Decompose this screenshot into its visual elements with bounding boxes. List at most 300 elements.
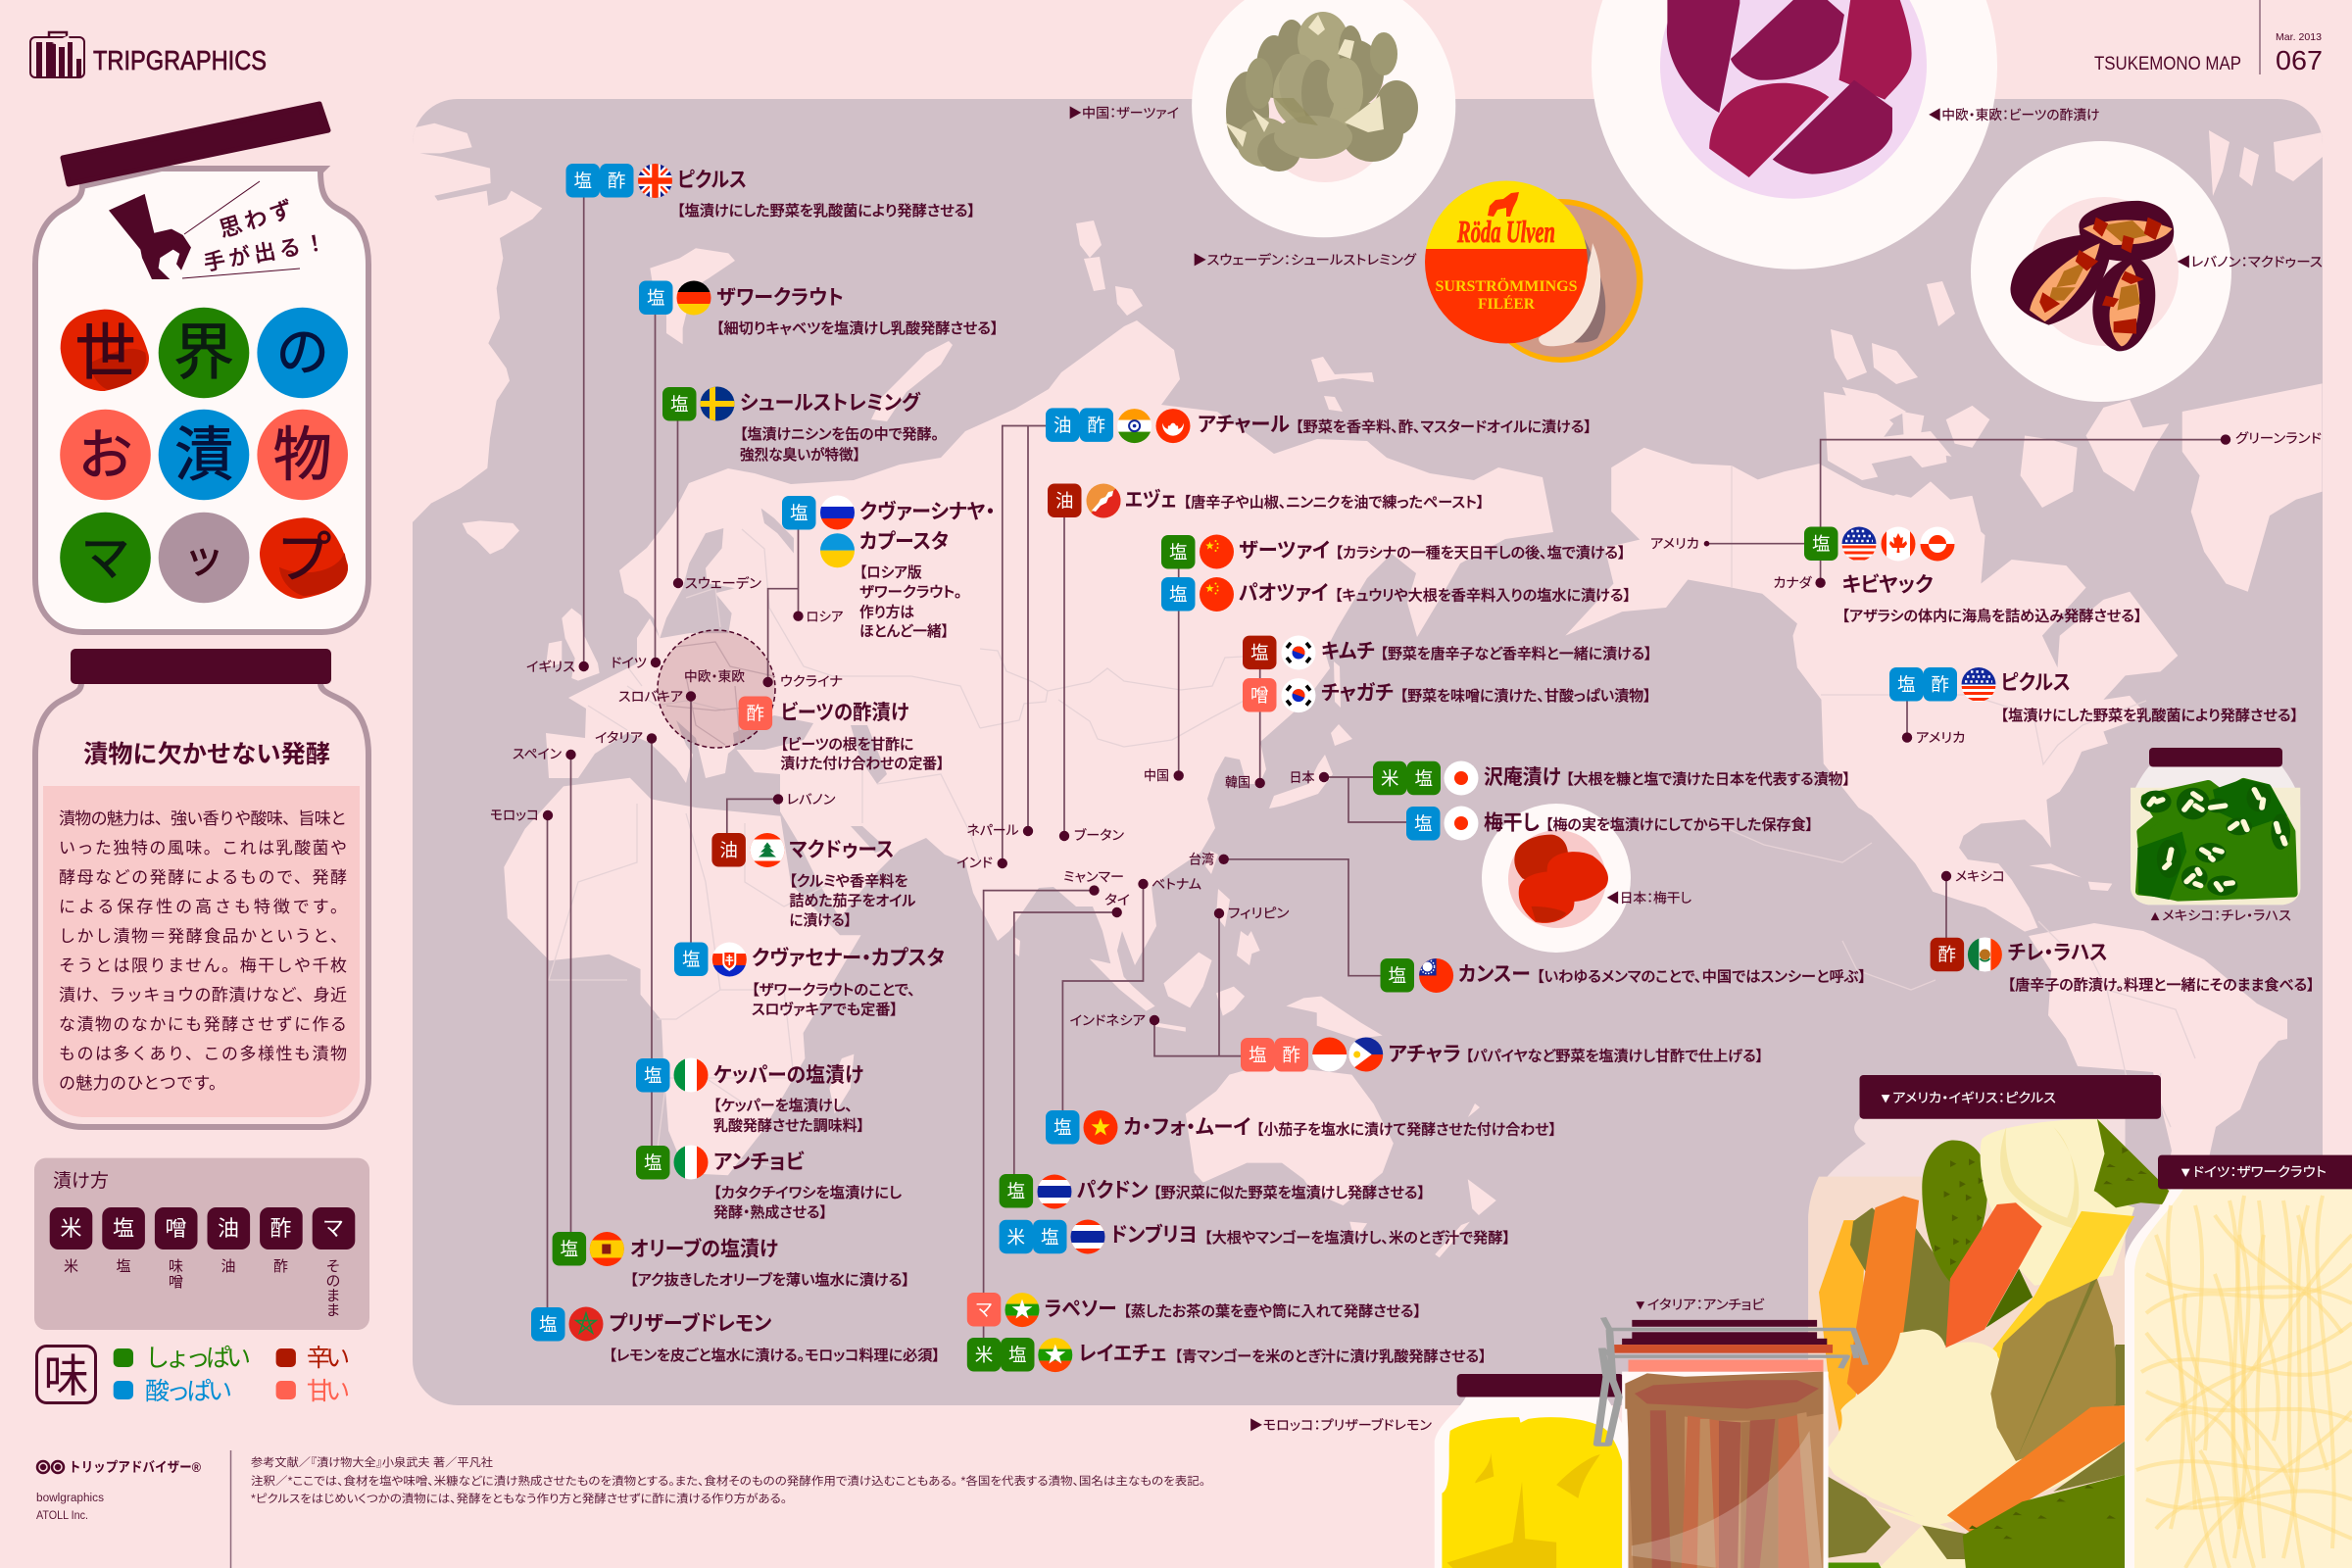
- name: アチャール: [1198, 414, 1290, 436]
- description: [713, 1098, 864, 1135]
- jar lid: [1457, 1374, 1624, 1397]
- location: ベトナム: [1062, 877, 1201, 1113]
- flag: Italy: [673, 1145, 709, 1180]
- description: に漬ける】: [789, 912, 852, 929]
- taste: sweet: 甘い: [307, 1378, 350, 1405]
- description: [789, 873, 916, 929]
- callout: シュールストレミング: [662, 386, 939, 464]
- illustration: chile rajas jar: [2131, 748, 2300, 905]
- description: 【小茄子を塩水に漬けて発酵させた付け合わせ】: [1256, 1121, 1556, 1139]
- can label: FILÉER: [1478, 296, 1536, 313]
- location: イギリス: イギリス: [526, 660, 575, 674]
- description: [859, 564, 962, 640]
- caption: zha cai: ▶中国：ザーツァイ: [1068, 106, 1179, 121]
- method badges: 酢: [608, 171, 625, 191]
- location: インド: [956, 425, 1049, 870]
- name: パオツァイ: [1239, 582, 1329, 605]
- method badge: 塩: [682, 949, 700, 970]
- method badge: [1243, 678, 1276, 711]
- method badge: 塩: [1007, 1181, 1025, 1201]
- flag: Vietnam: [1083, 1109, 1118, 1145]
- flag: Philippines: [1348, 1037, 1384, 1072]
- Oceania and island Asia: [1090, 931, 1496, 1257]
- method badges: 塩: [1414, 768, 1433, 789]
- method badge: 塩: [561, 1239, 578, 1259]
- legend captions: ま: [325, 1288, 341, 1304]
- method badges: 油: [1054, 416, 1071, 435]
- fermentation jar panel: [35, 649, 368, 1127]
- method badge: [531, 1307, 564, 1341]
- legend captions: 油: [220, 1258, 236, 1275]
- method badge: [1161, 535, 1196, 568]
- method badge: [662, 387, 696, 421]
- callout: プリザーブドレモン: [531, 1306, 940, 1364]
- method badges: 塩: [1249, 1045, 1266, 1065]
- description: 詰めた茄子をオイル: [789, 893, 916, 909]
- method badge: [782, 496, 815, 529]
- description: 【大根を糠と塩で漬けた日本を代表する漬物】: [1566, 770, 1850, 788]
- description: 【レモンを皮ごと塩水に漬ける。モロッコ料理に必須】: [609, 1347, 940, 1364]
- flag: Slovakia: [711, 942, 747, 977]
- method badge: 塩: [1388, 965, 1406, 986]
- flag: Canada: [1881, 526, 1916, 562]
- location: アメリカ (pickles): アメリカ: [1916, 731, 1966, 745]
- method badge: 塩: [1812, 533, 1830, 555]
- description: 【野菜を味噌に漬けた、甘酸っぱい漬物】: [1400, 688, 1651, 705]
- name: クヴァセナー・カプスタ: [752, 947, 945, 970]
- flag: Russia: [819, 495, 855, 530]
- location: イタリア: [595, 731, 657, 1152]
- callout: ビーツの酢漬け: [739, 696, 944, 772]
- description: 【アザラシの体内に海鳥を詰め込み発酵させる】: [1842, 608, 2142, 625]
- illustration: umeboshi: [1482, 804, 1631, 953]
- legend heading: 漬け方: [53, 1170, 109, 1192]
- location: 台湾: [1189, 853, 1384, 976]
- location: インド: インド: [956, 856, 993, 870]
- description: [740, 425, 939, 464]
- description: 【唐辛子や山椒、ニンニクを油で練ったペースト】: [1184, 494, 1484, 512]
- Africa: [504, 778, 861, 1175]
- method badge: [1161, 577, 1196, 612]
- location: メキシコ: [1941, 869, 2005, 941]
- masthead divider: [2259, 0, 2261, 74]
- body text: ものは多くあり、この多様性も漬物: [59, 1045, 347, 1063]
- location: スロバキア: スロバキア: [618, 690, 683, 704]
- method badge: 塩: [644, 1065, 662, 1086]
- caption: umeboshi: ◀日本：梅干し: [1606, 891, 1692, 906]
- name: [859, 500, 996, 553]
- method badges: 塩: [1041, 1227, 1058, 1248]
- tagline: [182, 181, 331, 278]
- body text: 漬物の魅力は、強い香りや酸味、旨味と: [59, 809, 347, 828]
- body text: の魅力のひとつです。: [59, 1074, 225, 1093]
- location: ネパール: [966, 425, 1033, 838]
- description: 【カタクチイワシを塩漬けにし: [713, 1185, 902, 1201]
- Central and Eastern Europe highlight: [658, 630, 775, 748]
- illustration: anchovy jar: [1597, 1317, 1866, 1568]
- description: 【ロシア版: [859, 564, 922, 581]
- method badges: [1000, 1220, 1066, 1253]
- method badge: [711, 833, 746, 866]
- method badge: 塩: [1414, 813, 1432, 834]
- method badge: 酢: [747, 704, 764, 723]
- location: ベトナム: ベトナム: [1152, 877, 1201, 892]
- description: 【細切りキャベツを塩漬けし乳酸発酵させる】: [716, 320, 998, 337]
- callout: ピクルス (UK): [566, 163, 975, 220]
- location: カナダ: [1774, 559, 1826, 590]
- Canadian channels: [1872, 456, 1985, 535]
- credit lines: bowlgraphics: [36, 1493, 104, 1504]
- location: タイ: [1014, 893, 1130, 1176]
- wordmark: TRIPGRAPHICS: [93, 45, 267, 75]
- name: 沢庵漬け: [1484, 766, 1561, 789]
- legend badges: 酢: [270, 1216, 292, 1241]
- legend captions: 米: [64, 1258, 78, 1275]
- callout: レイエチェ: [967, 1338, 1487, 1373]
- flag: Japan: [1444, 760, 1479, 796]
- location: 日本: 日本: [1290, 770, 1315, 785]
- method badge: [636, 1146, 670, 1180]
- North and South America: [1565, 383, 2323, 932]
- callout: キビヤック: [1804, 526, 2142, 625]
- method badges: 酢: [1282, 1045, 1300, 1065]
- caption banner: pickles: [1860, 1075, 2161, 1119]
- name: ドンブリヨ: [1110, 1223, 1198, 1247]
- name: カ・フォ・ムーイ: [1123, 1116, 1250, 1139]
- legend captions: ま: [325, 1302, 341, 1319]
- location: グリーンランド: グリーンランド: [2235, 431, 2322, 446]
- description: 【唐辛子の酢漬け。料理と一緒にそのまま食べる】: [2008, 977, 2315, 994]
- icon: taste box: 味: [43, 1350, 88, 1401]
- flag: Mexico: [1967, 937, 2002, 972]
- legend captions: の: [325, 1273, 341, 1290]
- location: イギリス: [526, 186, 589, 674]
- footer notes: [251, 1455, 1205, 1505]
- name: ピクルス: [677, 169, 747, 192]
- flag: Sweden: [700, 386, 735, 421]
- flag: Morocco: [568, 1306, 604, 1342]
- description: [713, 1185, 902, 1221]
- location: メキシコ: メキシコ: [1955, 869, 2005, 884]
- location: ロシア: [793, 519, 843, 624]
- sponsor name: トリップアドバイザー®: [69, 1459, 202, 1475]
- description: 【野沢菜に似た野菜を塩漬けし発酵させる】: [1153, 1185, 1425, 1201]
- borders: [549, 466, 2195, 1166]
- body text: [59, 809, 347, 1093]
- method badge: [1804, 527, 1838, 561]
- name: ビーツの酢漬け: [780, 702, 908, 724]
- caption: anchovy: ▼イタリア：アンチョビ: [1634, 1298, 1765, 1312]
- description: 【野菜を唐辛子など香辛料と一緒に漬ける】: [1380, 646, 1652, 662]
- legend badges: 塩: [113, 1216, 134, 1241]
- legend captions: 味: [169, 1258, 183, 1275]
- location: ウクライナ: ウクライナ: [780, 674, 843, 689]
- body text: な漬物のなかにも発酵させずに作る: [59, 1015, 347, 1034]
- icon: owl logo: [37, 1461, 64, 1473]
- flag: China: [1200, 534, 1235, 569]
- body text: しかし漬物＝発酵食品かというと、: [59, 927, 347, 946]
- method badge: 油: [1055, 490, 1073, 512]
- name: キムチ: [1321, 640, 1375, 662]
- location: グリーンランド: [1821, 431, 2322, 529]
- leader lines and location labels: [490, 186, 2322, 1341]
- body text: いった独特の風味。これは乳酸菌や: [59, 839, 347, 858]
- flag: Germany: [676, 280, 711, 316]
- method badge: [636, 1058, 670, 1092]
- name: ピクルス: [2001, 672, 2071, 695]
- method badge: [1000, 1174, 1033, 1207]
- callout: チャガチ: [1243, 678, 1651, 713]
- method badge: [639, 280, 672, 315]
- flag: Thailand: [1037, 1174, 1072, 1209]
- location: アメリカ (Kiviak): [1650, 537, 1808, 551]
- taste: spicy: 辛い: [307, 1345, 350, 1372]
- map title: TSUKEMONO MAP: [2094, 54, 2241, 74]
- title circles: の: [276, 323, 329, 382]
- title circles: プ: [276, 527, 331, 589]
- jar lid: [71, 649, 331, 684]
- flag: Taiwan: [1419, 958, 1454, 994]
- description: 強烈な臭いが特徴】: [740, 446, 860, 464]
- legend: tastes: [37, 1345, 350, 1405]
- jar body: [35, 169, 368, 632]
- location: スペイン: [513, 747, 576, 1235]
- caption: preserved lemon: ▶モロッコ：プリザーブドレモン: [1249, 1417, 1432, 1433]
- method badge: [1931, 938, 1964, 971]
- description: スロヴァキアでも定番】: [752, 1001, 898, 1018]
- location: 中欧・東欧: 中欧・東欧: [684, 669, 746, 684]
- location: 台湾: 台湾: [1189, 853, 1214, 866]
- description: 【ザワークラウトのことで、: [752, 982, 915, 999]
- method badge: [1046, 1110, 1080, 1145]
- name: カプースタ: [859, 530, 949, 553]
- method badge: 油: [719, 840, 738, 860]
- credit lines: [36, 1493, 104, 1522]
- location: ドイツ: ドイツ: [611, 656, 647, 670]
- name: アンチョビ: [713, 1152, 805, 1174]
- callout: 梅干し: [1406, 806, 1813, 841]
- flag: USA: [1841, 526, 1877, 562]
- method badge: [674, 943, 708, 976]
- method badge: [553, 1232, 586, 1266]
- masthead: [2094, 0, 2323, 75]
- callout: カンスー: [1380, 958, 1866, 994]
- location: 中国: 中国: [1144, 768, 1169, 783]
- description: 発酵・熟成させる】: [713, 1204, 827, 1221]
- can label: [1435, 278, 1578, 313]
- body text: そうとは限りません。梅干しや千枚: [59, 956, 347, 975]
- method badge: 酢: [1938, 945, 1956, 964]
- flag: Bhutan: [1086, 483, 1121, 518]
- description: 漬けた付け合わせの定番】: [780, 756, 944, 772]
- title circles: マ: [80, 531, 129, 586]
- location: アメリカ (Kiviak): アメリカ: [1650, 537, 1699, 551]
- callout: キムチ: [1243, 635, 1652, 670]
- method badge: 塩: [539, 1314, 557, 1335]
- location: タイ: タイ: [1104, 893, 1130, 907]
- method badges: 酢: [1087, 416, 1105, 435]
- description: 【青マンゴーを米のとぎ汁に漬け乳酸発酵させる】: [1175, 1348, 1487, 1365]
- description: ほとんど一緒】: [859, 623, 949, 640]
- seas: [660, 509, 794, 638]
- method badge: 塩: [647, 288, 664, 308]
- name: オリーブの塩漬け: [630, 1238, 778, 1261]
- issue date: Mar. 2013: [2276, 31, 2322, 43]
- can brand: Röda Ulven: [1456, 214, 1555, 249]
- method badge: マ: [975, 1299, 993, 1320]
- legend captions: 噌: [169, 1274, 183, 1291]
- credit lines: ATOLL Inc.: [36, 1510, 88, 1522]
- legend badges: 油: [218, 1216, 239, 1241]
- legend badges: マ: [322, 1216, 344, 1241]
- flag: Myanmar: [1038, 1338, 1073, 1373]
- caption banner: pickles: ▼アメリカ・イギリス：ピクルス: [1879, 1091, 2056, 1105]
- location: モロッコ: [490, 808, 553, 1311]
- description: 【ケッパーを塩漬けし、: [713, 1098, 853, 1114]
- description: 【カラシナの一種を天日干しの後、塩で漬ける】: [1335, 545, 1625, 562]
- description: 【パパイヤなど野菜を塩漬けし甘酢で仕上げる】: [1466, 1048, 1763, 1064]
- flag: USA: [1961, 666, 1996, 702]
- description: 【アク抜きしたオリーブを薄い塩水に漬ける】: [630, 1271, 909, 1289]
- callout: カ・フォ・ムーイ: [1046, 1109, 1556, 1145]
- flag: South Korea: [1281, 635, 1316, 670]
- name: ラペソー: [1045, 1298, 1117, 1321]
- title circles: ッ: [183, 535, 224, 581]
- callout: オリーブの塩漬け: [553, 1231, 909, 1289]
- flag: Indonesia: [1312, 1037, 1348, 1072]
- illustration: surströmming can: [1421, 176, 1642, 363]
- caption: chile rajas: ▲メキシコ：チレ・ラハス: [2148, 908, 2291, 923]
- legend captions: 酢: [273, 1258, 288, 1275]
- callout: アチャール: [1046, 408, 1592, 444]
- method badge: [1048, 484, 1082, 517]
- caption banner: sauerkraut: ▼ドイツ：ザワークラウト: [2179, 1164, 2327, 1180]
- method badges: [1046, 408, 1113, 442]
- callout: ラペソー: [967, 1293, 1421, 1328]
- location: 中国: [1144, 566, 1184, 783]
- callout: ザーツァイ: [1161, 534, 1625, 569]
- description: 乳酸発酵させた調味料】: [713, 1118, 864, 1135]
- location: ロシア: ロシア: [806, 610, 843, 624]
- title circles: 物: [273, 422, 332, 488]
- method badge: 塩: [790, 503, 808, 523]
- flag: Myanmar: [1004, 1293, 1040, 1328]
- flag: Lebanon: [750, 833, 785, 868]
- legend badges: [50, 1207, 355, 1250]
- name: クヴァーシナヤ・: [859, 500, 996, 523]
- method badges: [1373, 761, 1441, 795]
- location: スロバキア: [618, 690, 696, 946]
- description: 【塩漬けにした野菜を乳酸菌により発酵させる】: [677, 203, 975, 220]
- location: スウェーデン: スウェーデン: [685, 575, 761, 591]
- location: カナダ: カナダ: [1774, 576, 1812, 590]
- method badge: 塩: [1054, 1117, 1071, 1138]
- description: 【キュウリや大根を香辛料入りの塩水に漬ける】: [1335, 588, 1631, 604]
- method badges: [566, 164, 633, 198]
- callout: クヴァーシナヤ・カプースタ: [782, 495, 996, 640]
- method badge: [739, 696, 772, 730]
- name: カンスー: [1458, 963, 1531, 986]
- method badges: [1889, 667, 1957, 702]
- method badges: 塩: [573, 171, 592, 191]
- legend: pickling methods: [34, 1158, 369, 1330]
- method badges: 米: [975, 1345, 993, 1365]
- world map: [412, 99, 2323, 1405]
- description: 【大根やマンゴーを塩漬けし、米のとぎ汁で発酵】: [1204, 1229, 1510, 1247]
- legend captions: そ: [325, 1258, 341, 1275]
- name: チャガチ: [1321, 682, 1394, 705]
- flag: India: [1117, 409, 1152, 444]
- jar lid: [63, 104, 328, 184]
- callout: クヴァセナー・カプスタ: [674, 942, 945, 1018]
- location: 韓国: [1225, 666, 1265, 790]
- location: フィリピン: [1214, 906, 1290, 1056]
- name: パクドン: [1077, 1180, 1149, 1202]
- name: アチャラ: [1388, 1044, 1461, 1066]
- name: レイエチェ: [1078, 1343, 1167, 1365]
- method badge: 噌: [1250, 685, 1269, 706]
- callout: パクドン: [1000, 1174, 1425, 1209]
- location: ブータン: ブータン: [1074, 827, 1124, 843]
- icon: suitcase: [30, 32, 84, 77]
- location: アメリカ (pickles): [1902, 700, 1966, 745]
- location: 日本: [1290, 770, 1411, 822]
- method badge: [967, 1293, 1001, 1327]
- name: チレ・ラハス: [2008, 942, 2108, 964]
- name: キビヤック: [1842, 574, 1933, 597]
- location: スウェーデン: [673, 412, 761, 591]
- method badge: 塩: [670, 394, 688, 415]
- tagline: 思わず: [216, 195, 300, 242]
- taste: sour: 酸っぱい: [145, 1378, 232, 1405]
- callout: ケッパーの塩漬け: [636, 1057, 864, 1135]
- title circles: 世: [74, 319, 136, 387]
- legend badges: 噌: [165, 1216, 187, 1241]
- location: 韓国: 韓国: [1225, 775, 1250, 790]
- callout: アチャラ: [1241, 1037, 1763, 1072]
- description: 【ビーツの根を甘酢に: [780, 737, 913, 754]
- caption banner: sauerkraut: [2158, 1155, 2352, 1189]
- illustration: makdous: [1971, 141, 2231, 402]
- callout: チレ・ラハス: [1931, 937, 2315, 994]
- location: レバノン: レバノン: [786, 792, 836, 808]
- callout: 沢庵漬け: [1373, 760, 1850, 796]
- location: ミャンマー: [984, 870, 1124, 1341]
- logo: TRIPGRAPHICS: [30, 32, 267, 77]
- illustration: sauerkraut jar: [2125, 1189, 2352, 1568]
- illustration: pickles jar: [1808, 1116, 2169, 1568]
- flag: Thailand: [1070, 1219, 1105, 1254]
- body text: による保存性の高さも特徴です。: [59, 898, 347, 916]
- method badge: 塩: [1169, 584, 1187, 605]
- flag: Japan: [1444, 806, 1479, 841]
- location: スペイン: スペイン: [513, 747, 562, 761]
- description: 【梅の実を塩漬けにしてから干した保存食】: [1545, 817, 1813, 833]
- legend captions: 塩: [116, 1258, 131, 1275]
- callout: マクドゥース: [711, 833, 916, 929]
- legend badges: 米: [60, 1216, 82, 1241]
- flag: UK: [637, 163, 672, 198]
- flag: China: [1200, 576, 1235, 612]
- body text: 酵母などの発酵によるもので、発酵: [59, 868, 347, 887]
- icon: reaching hand: [109, 194, 191, 279]
- name: マクドゥース: [789, 839, 894, 861]
- illustration: preserved lemon jar: [1435, 1374, 1635, 1568]
- callout: ザワークラウト: [639, 280, 998, 337]
- name: シュールストレミング: [740, 391, 921, 415]
- title circles: お: [78, 424, 133, 486]
- description: ザワークラウト。: [859, 584, 962, 601]
